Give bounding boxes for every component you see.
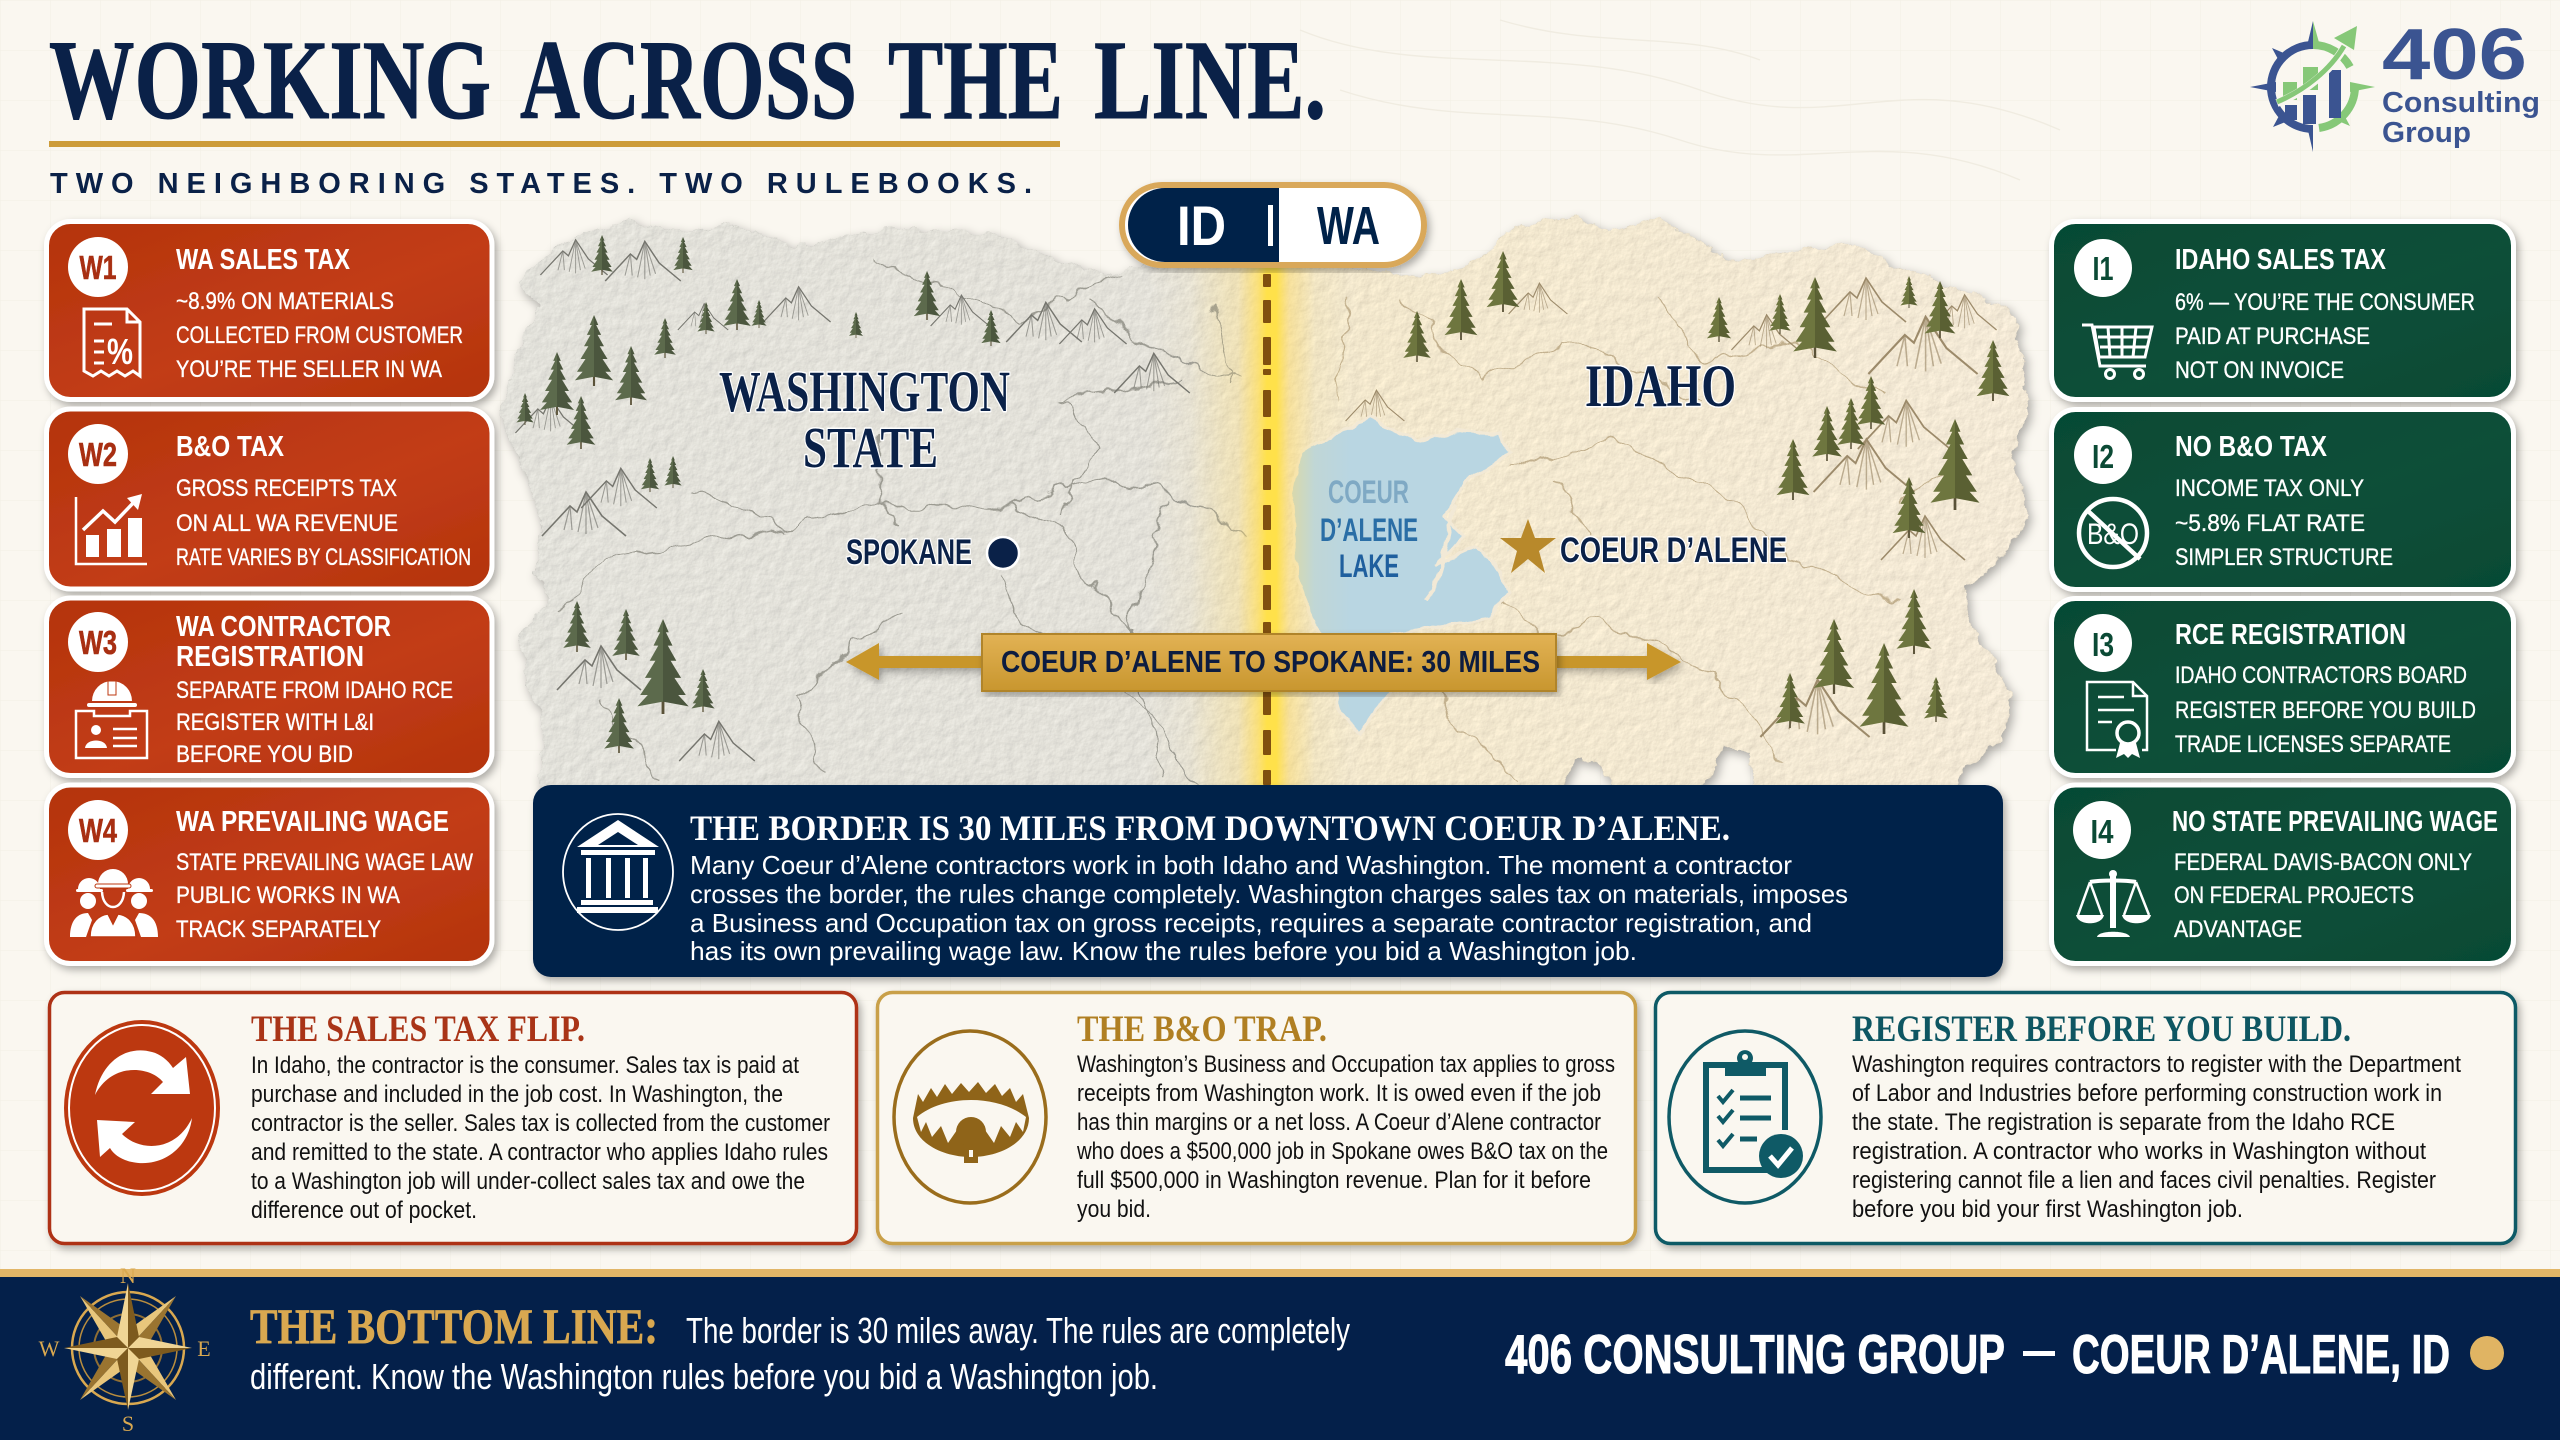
label: Idaho: IDAHO xyxy=(1585,353,1736,419)
card I1 text xyxy=(2175,244,2475,384)
panel: register before you build xyxy=(1656,992,2516,1244)
callout body xyxy=(690,850,1848,966)
map rivers and roads xyxy=(559,259,1960,780)
logo wordmark: Consulting xyxy=(2382,87,2540,119)
card I4 text: ON FEDERAL PROJECTS xyxy=(2174,882,2414,909)
icon: certificate xyxy=(2087,682,2147,758)
card W2 text: RATE VARIES BY CLASSIFICATION xyxy=(176,544,471,571)
card I4 text: ADVANTAGE xyxy=(2174,916,2302,943)
icon: receipt xyxy=(84,309,140,376)
the bottom line statement: THE BOTTOM LINE: xyxy=(250,1298,658,1354)
logo wordmark xyxy=(2382,15,2540,149)
map: Washington and Idaho border region xyxy=(500,185,2030,795)
sales tax body: and remitted to the state. A contractor who applies Idaho rules xyxy=(251,1139,828,1166)
card I1 text: NOT ON INVOICE xyxy=(2175,357,2344,384)
card W3 text: WA CONTRACTOR xyxy=(176,611,391,643)
sales tax body: purchase and included in the job cost. In Washington, the xyxy=(251,1081,783,1108)
panel: the sales tax flip xyxy=(50,992,856,1244)
icon: compass rose: S xyxy=(122,1411,134,1436)
icon: no B&O: B&O xyxy=(2087,518,2139,551)
label: Coeur d'Alene Lake xyxy=(1320,474,1418,584)
icon: compass rose xyxy=(39,1263,211,1436)
card W4 text: WA PREVAILING WAGE xyxy=(176,806,449,838)
trees: Washington side xyxy=(516,235,1001,753)
badge W3 xyxy=(68,612,128,672)
panel: the border callout xyxy=(533,785,2003,977)
icon: shopping cart xyxy=(2082,325,2152,378)
card W3 text: BEFORE YOU BID xyxy=(176,741,353,768)
card I2: no B&O tax xyxy=(2052,410,2514,590)
badge I1: I1 xyxy=(2092,250,2114,287)
card W1 text xyxy=(176,244,463,383)
mountains: Idaho side xyxy=(1346,278,1997,737)
icon: receipt: % xyxy=(107,331,133,372)
card I3 text xyxy=(2175,619,2476,758)
callout body: a Business and Occupation tax on gross receipts, requires a separate contractor registration, and xyxy=(690,908,1812,938)
card W4 text: TRACK SEPARATELY xyxy=(176,916,381,943)
badge I2 xyxy=(2074,426,2132,484)
badge W3: W3 xyxy=(79,624,117,661)
card I3: RCE registration xyxy=(2052,598,2514,776)
title: ACROSS xyxy=(520,18,857,143)
icon: hard hat and ID badge xyxy=(76,681,147,758)
logo: 406 Consulting Group xyxy=(2250,15,2540,152)
B&O trap body: who does a $500,000 job in Spokane owes B&O tax on the xyxy=(1076,1138,1608,1165)
card W3 text: SEPARATE FROM IDAHO RCE xyxy=(176,677,453,704)
mountains: Washington side xyxy=(515,240,1190,761)
badge I2: I2 xyxy=(2092,438,2114,475)
label: Washington State xyxy=(719,359,1010,480)
badge W2 xyxy=(68,424,128,484)
the bottom line statement: The border is 30 miles away. The rules are completely xyxy=(686,1310,1350,1351)
register body: registering cannot file a lien and faces civil penalties. Register xyxy=(1852,1167,2436,1194)
label: Washington State: STATE xyxy=(803,415,938,480)
logo wordmark: 406 xyxy=(2382,15,2527,95)
icon: bear trap xyxy=(894,1031,1046,1203)
callout body: has its own prevailing wage law. Know the rules before you bid a Washington job. xyxy=(690,936,1637,966)
logo compass mark xyxy=(2250,21,2375,152)
B&O trap body: receipts from Washington work. It is owed even if the job xyxy=(1077,1080,1601,1107)
icon: compass rose: N xyxy=(120,1263,136,1288)
card W3 text: REGISTRATION xyxy=(176,641,364,673)
badge I3: I3 xyxy=(2092,626,2114,663)
register body: the state. The registration is separate from the Idaho RCE xyxy=(1852,1109,2395,1136)
marker: Coeur d'Alene star xyxy=(1500,519,1787,573)
card I3 text: TRADE LICENSES SEPARATE xyxy=(2175,731,2451,758)
card W3: WA contractor registration xyxy=(46,598,492,776)
icon: no B&O xyxy=(2079,499,2147,567)
icon: flip arrows xyxy=(64,1020,220,1196)
icon: compass rose: W xyxy=(39,1336,60,1361)
state border dashed line xyxy=(1263,274,1271,785)
title: LINE. xyxy=(1094,18,1326,143)
card I1: Idaho sales tax xyxy=(2052,222,2514,400)
panel: Washington rules xyxy=(46,222,492,964)
badge W4: W4 xyxy=(79,812,117,849)
card W2 text xyxy=(176,431,471,571)
sales tax body: difference out of pocket. xyxy=(251,1197,477,1224)
card W4 text xyxy=(176,806,473,943)
B&O trap heading: THE B&O TRAP. xyxy=(1077,1009,1327,1050)
icon: crew of workers xyxy=(70,869,158,937)
card W1 text: COLLECTED FROM CUSTOMER xyxy=(176,322,463,349)
card I1 text: IDAHO SALES TAX xyxy=(2175,244,2387,276)
marker: Coeur d'Alene star: COEUR D’ALENE xyxy=(1560,531,1787,570)
callout heading: THE BORDER IS 30 MILES FROM DOWNTOWN COEUR D’ALENE. xyxy=(690,808,1730,848)
register body xyxy=(1852,1051,2461,1223)
logo wordmark: Group xyxy=(2382,117,2471,149)
card I3 text: REGISTER BEFORE YOU BUILD xyxy=(2175,697,2476,724)
ID | WA pill: ID xyxy=(1177,194,1226,257)
card W2 text: B&O TAX xyxy=(176,431,285,463)
the bottom line statement xyxy=(250,1298,1350,1397)
border glow xyxy=(1190,268,1350,786)
register body: registration. A contractor who works in Washington without xyxy=(1852,1138,2426,1165)
sales tax body: In Idaho, the contractor is the consumer. Sales tax is paid at xyxy=(251,1052,799,1079)
Coeur d'Alene Lake xyxy=(1291,417,1510,734)
marker: Spokane: SPOKANE xyxy=(846,533,972,572)
label: Coeur d'Alene Lake: D’ALENE xyxy=(1320,512,1418,548)
card I2 text xyxy=(2175,431,2393,571)
ID | WA pill: WA xyxy=(1317,196,1380,256)
card W4 text: PUBLIC WORKS IN WA xyxy=(176,882,400,909)
title underline rule xyxy=(49,141,1060,147)
card I2 text: ~5.8% FLAT RATE xyxy=(2175,510,2365,537)
badge I3 xyxy=(2074,614,2132,672)
card I4: no state prevailing wage xyxy=(2052,785,2514,964)
badge W4 xyxy=(68,800,128,860)
card I3 text: IDAHO CONTRACTORS BOARD xyxy=(2175,662,2467,689)
icon: clipboard checklist xyxy=(1669,1031,1821,1203)
panel: the B&O trap xyxy=(878,992,1636,1244)
icon: courthouse xyxy=(563,814,673,930)
sales tax body: to a Washington job will under-collect sales tax and owe the xyxy=(251,1168,805,1195)
sales tax heading: THE SALES TAX FLIP. xyxy=(251,1009,585,1050)
B&O trap body: has thin margins or a net loss. A Coeur d’Alene contractor xyxy=(1077,1109,1601,1136)
card I2 text: SIMPLER STRUCTURE xyxy=(2175,544,2393,571)
B&O trap body: full $500,000 in Washington revenue. Plan for it before xyxy=(1077,1167,1591,1194)
icon: compass rose: E xyxy=(197,1336,211,1361)
card W1 text: ~8.9% ON MATERIALS xyxy=(176,288,394,315)
trees: Idaho side xyxy=(1403,251,2009,734)
badge I4 xyxy=(2073,801,2131,859)
card W2 text: GROSS RECEIPTS TAX xyxy=(176,475,397,502)
badge W1 xyxy=(68,237,128,297)
sales tax body xyxy=(251,1052,830,1224)
title xyxy=(49,18,1326,143)
footer band xyxy=(0,1263,2560,1440)
card I4 text xyxy=(2172,806,2498,943)
register body: Washington requires contractors to register with the Department xyxy=(1852,1051,2461,1078)
icon: rising bar chart xyxy=(76,494,147,564)
card W4 text: STATE PREVAILING WAGE LAW xyxy=(176,849,473,876)
card W3 text xyxy=(176,611,453,768)
register body: of Labor and Industries before performing construction work in xyxy=(1852,1080,2442,1107)
card W2: B&O tax xyxy=(46,409,492,589)
card W3 text: REGISTER WITH L&I xyxy=(176,709,374,736)
B&O trap body: you bid. xyxy=(1077,1196,1151,1223)
distance banner: COEUR D’ALENE TO SPOKANE: 30 MILES xyxy=(1001,644,1540,679)
sales tax body: contractor is the seller. Sales tax is collected from the customer xyxy=(251,1110,830,1137)
title: THE xyxy=(888,18,1063,143)
label: Coeur d'Alene Lake: LAKE xyxy=(1339,548,1399,584)
badge W1: W1 xyxy=(80,249,116,286)
register heading: REGISTER BEFORE YOU BUILD. xyxy=(1852,1009,2351,1050)
badge W2: W2 xyxy=(79,436,117,473)
callout body: crosses the border, the rules change completely. Washington charges sales tax on materials, imposes xyxy=(690,879,1848,909)
card W2 text: ON ALL WA REVENUE xyxy=(176,510,398,537)
icon: balance scales xyxy=(2076,870,2151,937)
subtitle: TWO NEIGHBORING STATES. TWO RULEBOOKS. xyxy=(50,168,1032,200)
ID | WA pill xyxy=(1122,185,1424,265)
callout body: Many Coeur d’Alene contractors work in both Idaho and Washington. The moment a contractor xyxy=(690,850,1792,880)
card W1: WA sales tax xyxy=(46,222,492,400)
card W1 text: WA SALES TAX xyxy=(176,244,351,276)
register body: before you bid your first Washington job. xyxy=(1852,1196,2243,1223)
card I1 text: 6% — YOU’RE THE CONSUMER xyxy=(2175,289,2475,316)
card I2 text: NO B&O TAX xyxy=(2175,431,2328,463)
badge I1 xyxy=(2074,239,2132,297)
card I2 text: INCOME TAX ONLY xyxy=(2175,475,2364,502)
company location xyxy=(1505,1323,2504,1385)
company location: 406 CONSULTING GROUP xyxy=(1505,1323,2005,1385)
B&O trap body xyxy=(1076,1051,1615,1223)
distance banner xyxy=(982,634,1556,691)
badge I4: I4 xyxy=(2090,813,2114,850)
the bottom line statement: different. Know the Washington rules before you bid a Washington job. xyxy=(250,1356,1158,1397)
label: Washington State: WASHINGTON xyxy=(719,359,1010,424)
B&O trap body: Washington’s Business and Occupation tax applies to gross xyxy=(1077,1051,1615,1078)
panel: Idaho rules xyxy=(2052,222,2514,964)
card I3 text: RCE REGISTRATION xyxy=(2175,619,2406,651)
card I1 text: PAID AT PURCHASE xyxy=(2175,323,2370,350)
map paper silhouette xyxy=(500,216,2030,795)
card I4 text: FEDERAL DAVIS-BACON ONLY xyxy=(2174,849,2472,876)
title: WORKING xyxy=(49,18,491,143)
label: Coeur d'Alene Lake: COEUR xyxy=(1328,474,1409,510)
card W4: WA prevailing wage xyxy=(46,785,492,964)
distance arrows xyxy=(846,643,1681,680)
card W1 text: YOU’RE THE SELLER IN WA xyxy=(176,356,442,383)
